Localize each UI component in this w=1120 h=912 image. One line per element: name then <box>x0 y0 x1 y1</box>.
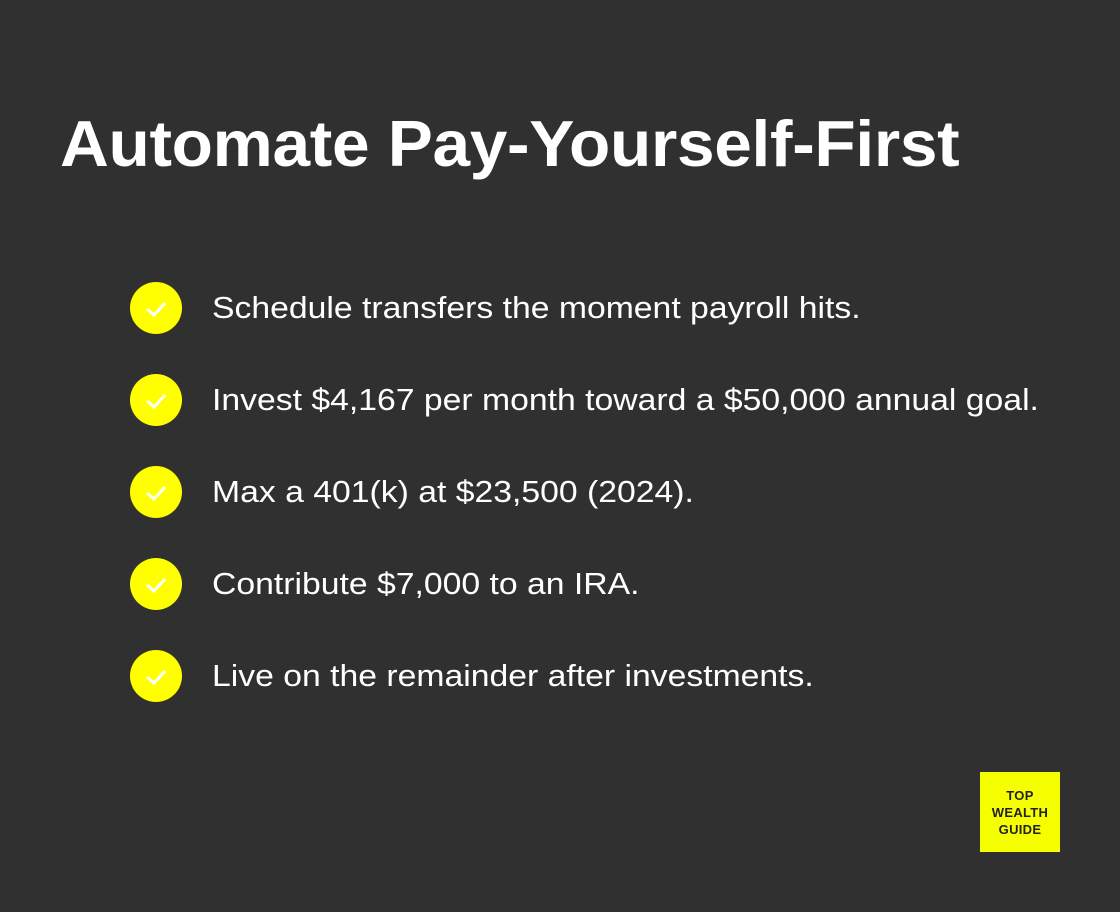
checklist item 3 <box>130 466 694 518</box>
logo: WEALTH <box>992 804 1048 820</box>
checklist item 5 <box>130 650 814 702</box>
icon: check <box>130 558 182 610</box>
text: item 3: Max a 401(k) at $23,500 (2024). <box>212 474 694 509</box>
logo: GUIDE <box>999 822 1041 836</box>
icon: check <box>130 650 182 702</box>
text: item 2: Invest $4,167 per month toward a $50,000 annual goal. <box>212 382 1039 417</box>
logo: TOP <box>1006 788 1034 802</box>
text: item 1: Schedule transfers the moment payroll hits. <box>212 290 861 325</box>
logo <box>980 772 1060 852</box>
icon: check <box>130 466 182 518</box>
checklist item 4 <box>130 558 639 610</box>
checklist item 1 <box>130 282 861 334</box>
text: item 5: Live on the remainder after investments. <box>212 658 814 693</box>
title: Automate Pay-Yourself-First <box>60 107 959 180</box>
checklist item 2 <box>130 374 1039 426</box>
icon: check <box>130 374 182 426</box>
text: item 4: Contribute $7,000 to an IRA. <box>212 566 639 601</box>
icon: check <box>130 282 182 334</box>
